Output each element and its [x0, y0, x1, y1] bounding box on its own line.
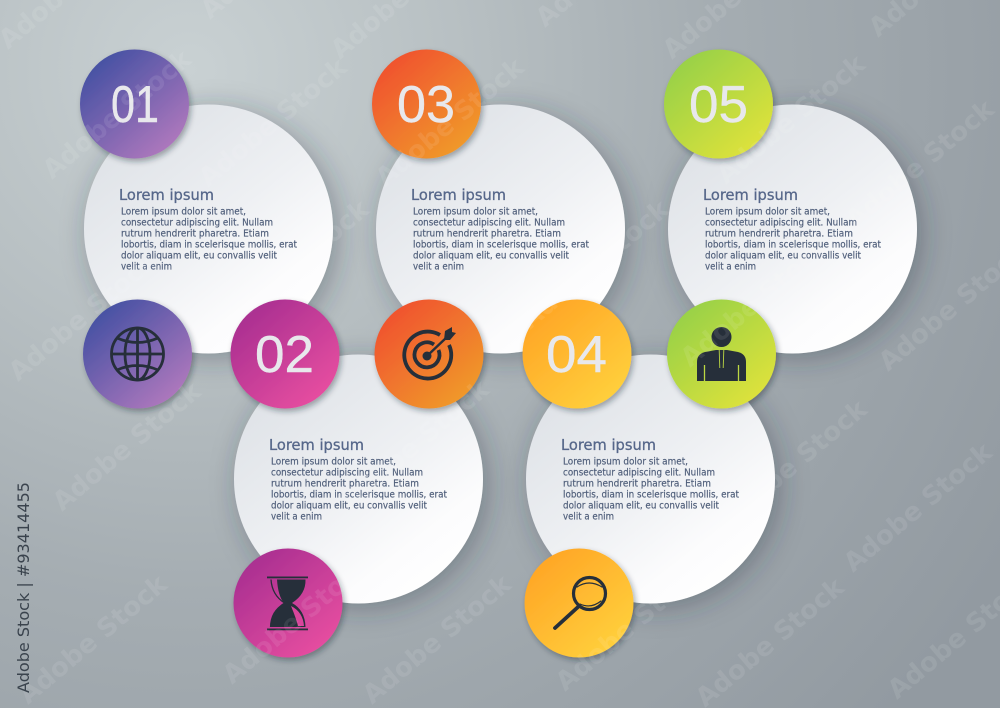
number badge 03: 03 — [397, 76, 455, 134]
number badge 05 — [664, 50, 773, 158]
step 2 body text: rutrum hendrerit pharetra. Etiam — [271, 478, 419, 489]
number badge 04: 04 — [546, 326, 607, 384]
icon: globe badge — [83, 300, 192, 408]
number badge 03 — [372, 50, 481, 158]
number badge 02 — [230, 300, 340, 408]
watermark: Adobe Stock repeated: Adobe Stock — [357, 569, 518, 708]
step 5 body text: lobortis, diam in scelerisque mollis, erat — [705, 239, 881, 250]
icon: magnifier badge — [524, 548, 634, 658]
watermark: Adobe Stock repeated: Adobe Stock — [37, 44, 198, 185]
panel: step 3 disc — [376, 104, 625, 354]
step 5 body text: Lorem ipsum dolor sit amet, — [705, 206, 830, 217]
step 3 body text: Lorem ipsum dolor sit amet, — [413, 206, 538, 217]
watermark: Adobe Stock repeated: Adobe Stock — [47, 376, 208, 517]
watermark: Adobe Stock repeated: Adobe Stock — [335, 374, 496, 515]
step 1 body text: dolor aliquam elit, eu convallis velit — [121, 250, 277, 261]
watermark: Adobe Stock repeated: Adobe Stock — [215, 194, 376, 335]
step 3 body text — [413, 206, 589, 272]
step 2 body text: dolor aliquam elit, eu convallis velit — [271, 500, 427, 511]
watermark: Adobe Stock repeated: Adobe Stock — [713, 394, 874, 535]
step 1 body text: rutrum hendrerit pharetra. Etiam — [121, 228, 269, 239]
step 1 body text: lobortis, diam in scelerisque mollis, erat — [121, 239, 297, 250]
watermark: Adobe Stock repeated: Adobe Stock — [217, 549, 378, 690]
step 2 body text: lobortis, diam in scelerisque mollis, erat — [271, 489, 447, 500]
step 5 heading: Lorem ipsum — [703, 186, 798, 204]
step 2 body text: velit a enim — [271, 511, 322, 522]
icon: businessman badge — [667, 300, 776, 408]
number badge 01: 01 — [111, 76, 159, 134]
watermark: Adobe Stock repeated: Adobe Stock — [840, 94, 1000, 235]
step 2 body text: Lorem ipsum dolor sit amet, — [271, 456, 396, 467]
watermark: Adobe Stock repeated: Adobe Stock — [550, 556, 711, 697]
icon: hourglass badge — [234, 548, 342, 658]
number badge 05: 05 — [689, 76, 748, 134]
number badge 01 — [80, 50, 189, 158]
number badge 04 — [522, 300, 632, 408]
step 5 body text: dolor aliquam elit, eu convallis velit — [705, 250, 861, 261]
step 2 heading: Lorem ipsum — [269, 436, 364, 454]
step 4 body text: dolor aliquam elit, eu convallis velit — [563, 500, 719, 511]
step 3 body text: velit a enim — [413, 261, 464, 272]
number badge 02: 02 — [255, 326, 314, 384]
panel: step 1 disc — [84, 104, 333, 354]
step 5 body text: consectetur adipiscing elit. Nullam — [705, 217, 857, 228]
watermark: Adobe Stock repeated: Adobe Stock — [193, 52, 354, 193]
panel: step 2 disc — [234, 354, 483, 604]
step 2 body text — [271, 456, 447, 522]
watermark: Adobe Stock repeated: Adobe Stock — [838, 437, 999, 578]
step 4 body text: velit a enim — [563, 511, 614, 522]
step 1 body text: velit a enim — [121, 261, 172, 272]
watermark: Adobe Stock repeated: Adobe Stock — [515, 194, 676, 335]
watermark: Adobe Stock repeated: Adobe Stock — [675, 232, 836, 373]
step 3 body text: consectetur adipiscing elit. Nullam — [413, 217, 565, 228]
step 2 body text: consectetur adipiscing elit. Nullam — [271, 467, 423, 478]
step 1 heading: Lorem ipsum — [119, 186, 214, 204]
watermark: Adobe Stock repeated: Adobe Stock — [711, 49, 872, 190]
step 3 heading: Lorem ipsum — [411, 186, 506, 204]
step 1 body text: consectetur adipiscing elit. Nullam — [121, 217, 273, 228]
watermark: Adobe Stock repeated: Adobe Stock — [370, 52, 531, 193]
step 5 body text: rutrum hendrerit pharetra. Etiam — [705, 228, 853, 239]
step 4 body text — [563, 456, 739, 522]
step 4 body text: consectetur adipiscing elit. Nullam — [563, 467, 715, 478]
step 3 body text: dolor aliquam elit, eu convallis velit — [413, 250, 569, 261]
step 4 heading: Lorem ipsum — [561, 436, 656, 454]
step 3 body text: lobortis, diam in scelerisque mollis, erat — [413, 239, 589, 250]
step 4 body text: lobortis, diam in scelerisque mollis, erat — [563, 489, 739, 500]
step 1 body text — [121, 206, 297, 272]
step 3 body text: rutrum hendrerit pharetra. Etiam — [413, 228, 561, 239]
panel: step 5 disc — [668, 104, 917, 354]
step 5 body text — [705, 206, 881, 272]
watermark: Adobe Stock repeated: Adobe Stock — [3, 246, 164, 387]
stock id caption: Adobe Stock | #93414455 — [14, 482, 33, 693]
step 4 body text: rutrum hendrerit pharetra. Etiam — [563, 478, 711, 489]
icon: target badge — [374, 300, 484, 408]
step 5 body text: velit a enim — [705, 261, 756, 272]
panel: step 4 disc — [526, 354, 775, 604]
step 1 body text: Lorem ipsum dolor sit amet, — [121, 206, 246, 217]
watermark: Adobe Stock repeated: Adobe Stock — [13, 569, 174, 708]
step 4 body text: Lorem ipsum dolor sit amet, — [563, 456, 688, 467]
